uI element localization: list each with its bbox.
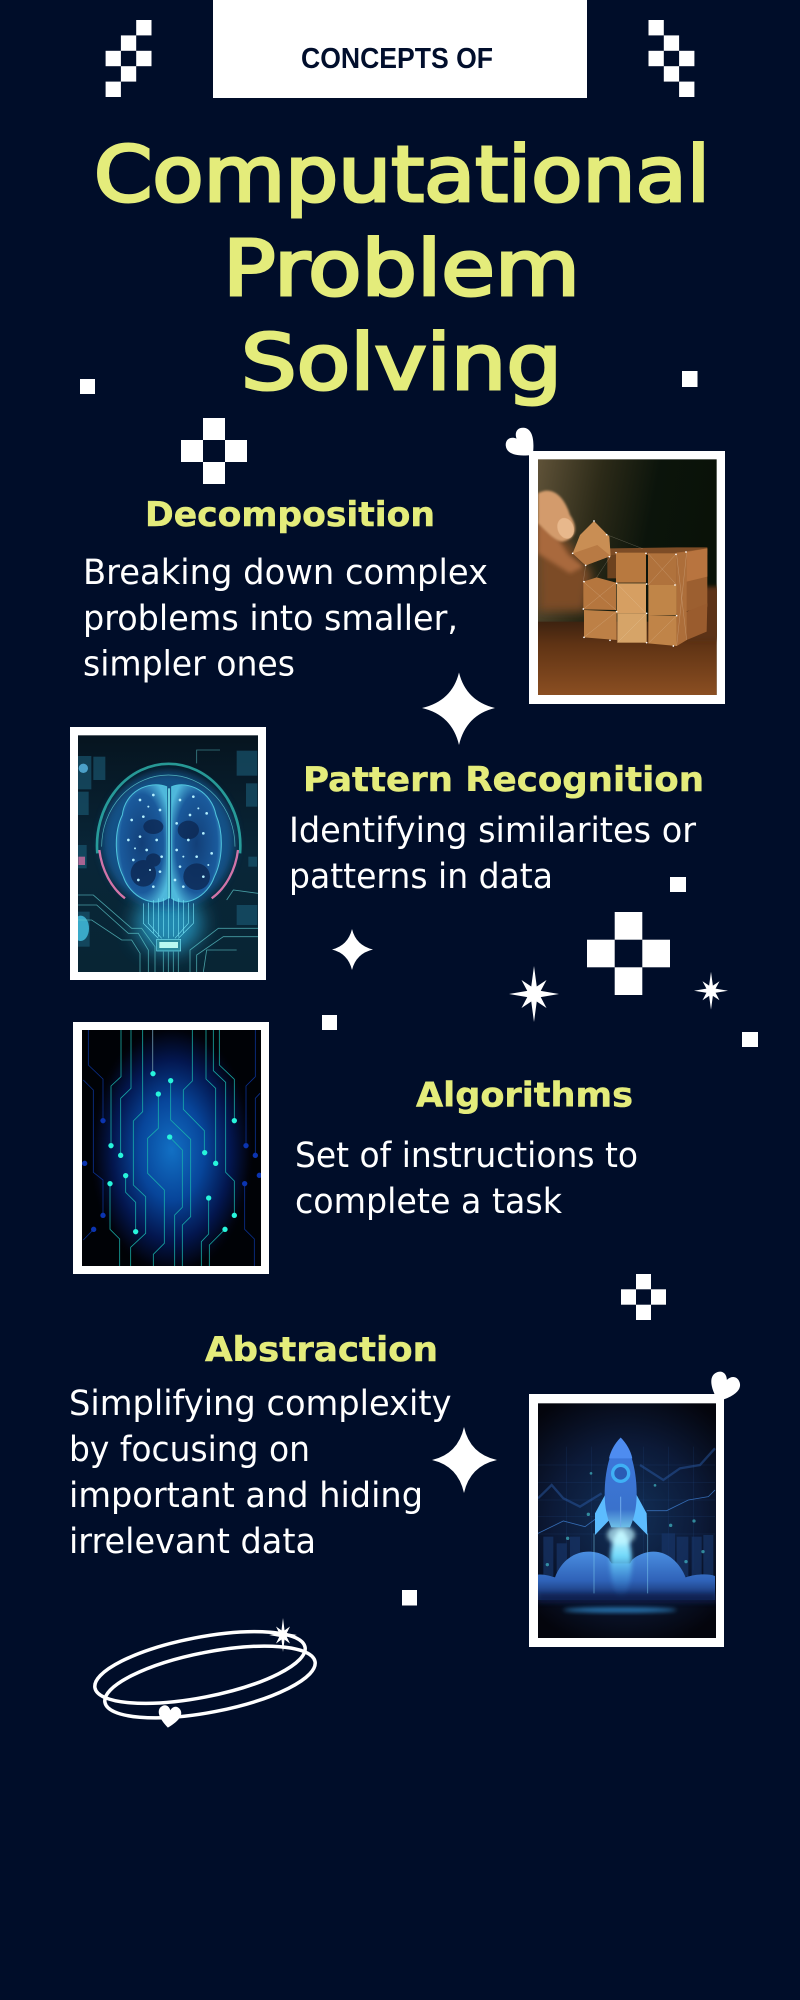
icon: pixel pattern left — [106, 20, 152, 97]
title: Problem — [223, 225, 580, 314]
heading: decomposition: Decomposition — [145, 495, 435, 535]
photo: glowing brain — [70, 727, 266, 980]
heading: algorithms: Algorithms — [416, 1076, 633, 1116]
icon: heart on photo — [502, 424, 543, 465]
text: decomposition description — [83, 553, 488, 684]
text: abstraction description: Simplifying complexity — [69, 1384, 452, 1424]
heading: pattern recognition: Pattern Recognition — [303, 760, 704, 800]
text: algorithms description: complete a task — [295, 1182, 563, 1222]
neural traces — [143, 897, 193, 938]
text: pattern recognition description: Identifying similarites or — [289, 811, 697, 851]
photo: rocket launch — [529, 1394, 724, 1647]
small square — [80, 379, 95, 394]
title: Solving — [241, 319, 562, 408]
icon: pixel cross large — [587, 912, 670, 995]
text: pattern recognition description — [289, 811, 697, 897]
small square — [322, 1015, 337, 1030]
small square — [670, 877, 686, 892]
infographic — [70, 0, 758, 1728]
ring — [97, 764, 240, 853]
photo: circuit board — [73, 1022, 269, 1274]
wire mesh — [583, 535, 687, 646]
small square — [742, 1032, 758, 1047]
text: decomposition description: simpler ones — [83, 644, 295, 684]
icon: pixel pattern right — [648, 20, 694, 97]
heading: abstraction: Abstraction — [205, 1330, 438, 1370]
icon: four point star small — [332, 929, 373, 970]
icon: pixel cross — [181, 418, 247, 484]
held cube — [573, 521, 611, 565]
title: Computational — [94, 131, 710, 220]
text: abstraction description: by focusing on — [69, 1430, 310, 1470]
front blocks — [616, 553, 646, 583]
bright traces — [110, 1030, 234, 1267]
rocket fins — [595, 1495, 609, 1535]
text: algorithms description — [295, 1136, 638, 1222]
icon: four point star — [422, 672, 495, 745]
icon: orbit rings with sparkle and heart — [89, 1618, 321, 1732]
chart grid — [538, 1447, 715, 1570]
small square — [402, 1590, 417, 1606]
header box: concepts of: CONCEPTS OF — [301, 43, 493, 75]
brain lobes — [116, 785, 167, 902]
dark traces — [83, 1030, 260, 1267]
text: pattern recognition description: patterns in data — [289, 857, 553, 897]
blurred palm — [538, 523, 592, 612]
side panels — [78, 751, 257, 947]
side blocks — [610, 547, 707, 555]
icon: sparkle — [509, 966, 559, 1022]
icon: heart on rocket photo — [705, 1369, 743, 1407]
rocket body — [605, 1438, 637, 1527]
flame — [609, 1520, 632, 1563]
icon: pixel cross small — [621, 1274, 666, 1320]
text: abstraction description — [69, 1384, 452, 1562]
text: decomposition description: problems into smaller, — [83, 599, 458, 639]
text: decomposition description: Breaking down complex — [83, 553, 488, 593]
icon: four point star — [432, 1427, 497, 1493]
text: algorithms description: Set of instructions to — [295, 1136, 638, 1176]
photo: wooden cubes — [529, 451, 725, 704]
header box: concepts of — [213, 0, 587, 98]
cloud — [538, 1552, 715, 1600]
text: abstraction description: irrelevant data — [69, 1522, 316, 1562]
icon: sparkle small — [694, 972, 728, 1010]
title — [94, 131, 710, 408]
text: abstraction description: important and hiding — [69, 1476, 423, 1516]
small square — [682, 371, 698, 387]
